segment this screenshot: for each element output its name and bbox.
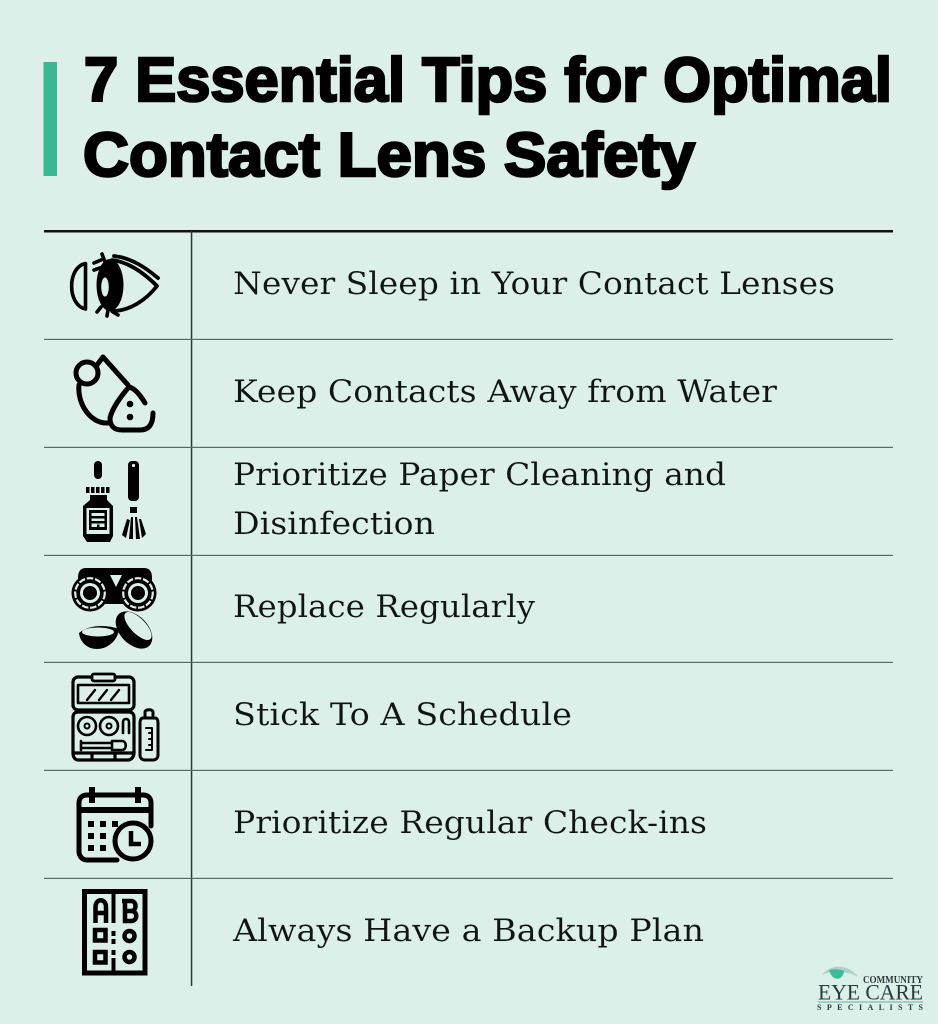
logo: Community Eye Care Specialists [817, 967, 924, 1012]
title: 7 Essential Tips for Optimal [84, 46, 892, 115]
logo text: SPECIALISTS [817, 1003, 924, 1012]
tip text: Disinfection [233, 506, 435, 542]
tip text: Prioritize Regular Check-ins [233, 805, 707, 841]
logo text: COMMUNITY [863, 975, 923, 986]
tip text: Prioritize Paper Cleaning and [233, 457, 726, 493]
tip row 3 [83, 457, 726, 542]
tip row 1 [72, 254, 835, 316]
icon: lens case and contact lenses [72, 568, 159, 656]
title [83, 46, 892, 190]
tip text: Always Have a Backup Plan [232, 913, 704, 949]
icon: eye with contact lens [72, 254, 158, 316]
icon: logo eye [822, 967, 858, 979]
title: Contact Lens Safety [83, 121, 696, 190]
title accent bar [44, 62, 57, 176]
tip row 5 [73, 674, 572, 760]
icon: contact lens kit [73, 674, 158, 760]
tip text: Never Sleep in Your Contact Lenses [233, 266, 835, 302]
icon: eye test chart [84, 890, 145, 974]
icon: calendar with clock [79, 787, 151, 860]
tip row 6 [79, 787, 707, 860]
tip row 4 [72, 568, 535, 656]
tip text: Stick To A Schedule [233, 697, 572, 733]
logo text: EYE CARE [818, 980, 923, 1004]
tip text: Keep Contacts Away from Water [233, 374, 777, 410]
icon: dropper bottle and cleaning brush [83, 461, 146, 542]
tip row 7 [84, 890, 704, 974]
tip row 2 [76, 357, 777, 430]
tip text [233, 457, 726, 542]
logo text [817, 975, 924, 1012]
icon: lens solution and droplet [76, 357, 153, 430]
tip text: Replace Regularly [233, 589, 535, 625]
